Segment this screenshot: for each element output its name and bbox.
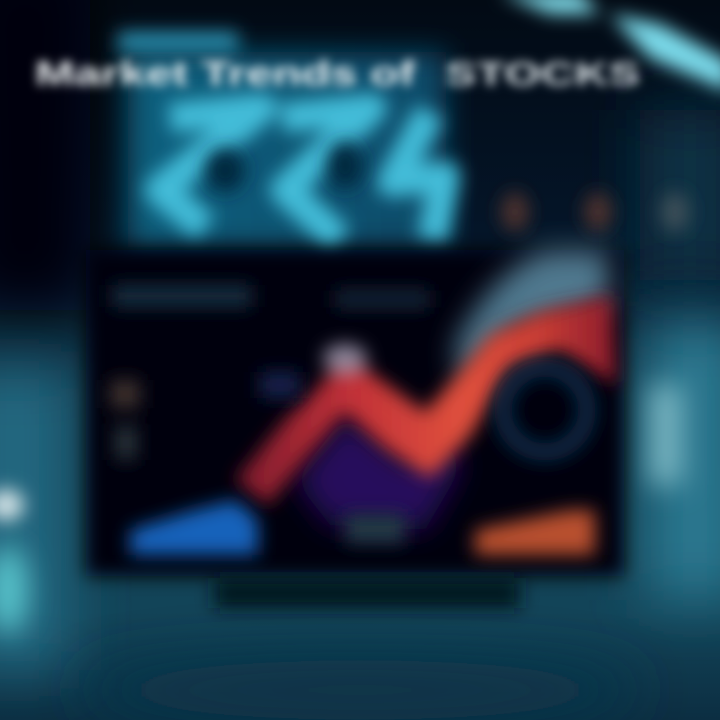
big teal number panel [118, 32, 446, 247]
bottom tiles [130, 500, 595, 555]
title: Market Trends of [35, 55, 416, 93]
glow spots: left and right edges [0, 385, 682, 634]
chart: left labels [110, 285, 430, 460]
chart: purple area [295, 415, 460, 530]
title: STOCKS [445, 56, 640, 92]
dark holes between numerals [205, 141, 363, 192]
monitor stand [214, 578, 520, 608]
chart: upper blue-grey area [455, 250, 610, 385]
chart: red wave [235, 295, 616, 505]
big numerals [160, 108, 445, 240]
title [35, 55, 640, 93]
light streak: top right [500, 0, 720, 92]
donut chart [503, 368, 587, 452]
monitor [86, 250, 624, 608]
faint top-right markers [501, 192, 689, 232]
